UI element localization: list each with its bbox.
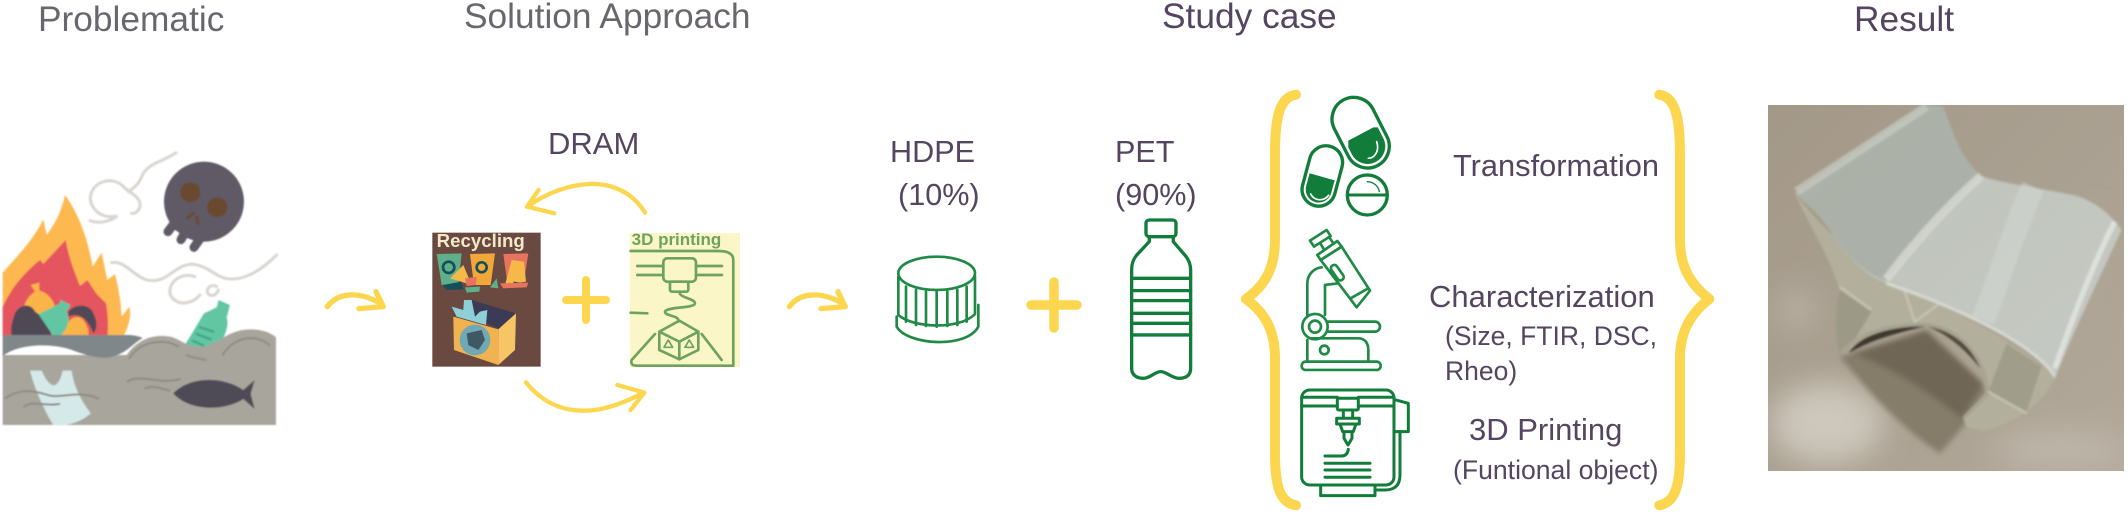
floor bbox=[1760, 97, 2128, 480]
recycling panel title: Recycling bbox=[437, 230, 525, 251]
text: Characterization: Characterization bbox=[1429, 279, 1655, 314]
plus between recycling and 3D printing bbox=[566, 280, 606, 320]
text: 3D Printing: (Funtional object) bbox=[1453, 455, 1658, 485]
floor patches and shadow bbox=[1770, 217, 2126, 467]
icon: PET bottle bbox=[1132, 220, 1191, 378]
left brace bbox=[1246, 95, 1296, 505]
recycling bins bbox=[437, 253, 528, 293]
label: HDPE 10% bbox=[890, 135, 980, 212]
label: PET 90%: (90%) bbox=[1115, 178, 1197, 212]
arch dark crescent bbox=[1848, 326, 1926, 353]
3D printing panel title: 3D printing bbox=[632, 230, 721, 249]
soft highlights bbox=[1796, 107, 1926, 192]
icon: pills bbox=[1300, 96, 1391, 217]
arch rim bbox=[1842, 324, 1988, 418]
chair underside and legs bbox=[1795, 193, 2055, 431]
right brace bbox=[1659, 95, 1709, 505]
text: 3D Printing bbox=[1453, 412, 1658, 485]
text: Characterization: Rheo) bbox=[1445, 356, 1517, 386]
plus between HDPE and PET bbox=[1031, 282, 1077, 328]
label: HDPE 10%: HDPE bbox=[890, 135, 975, 169]
text: Characterization: (Size, FTIR, DSC, bbox=[1445, 321, 1657, 351]
skull bbox=[164, 162, 244, 247]
printer line drawing bbox=[631, 251, 733, 366]
icon: bottle cap bbox=[897, 257, 978, 342]
photo: 3D printed chair bbox=[1768, 105, 2124, 471]
text: 3D Printing: 3D Printing bbox=[1469, 412, 1622, 447]
polluted ground, bottle, bag and fish bbox=[3, 300, 276, 425]
icon: microscope bbox=[1302, 230, 1381, 370]
chair seat surface bbox=[1795, 105, 2122, 378]
text: Transformation: Transformation bbox=[1453, 148, 1659, 183]
arrow: 3D printing back to recycling bbox=[527, 184, 645, 213]
arrow: recycling to 3D printing bbox=[526, 382, 644, 411]
heading: Result: Result bbox=[1854, 0, 1954, 39]
illustration: pollution problem bbox=[3, 153, 277, 425]
panel: 3D printing bbox=[630, 230, 740, 367]
text: Characterization bbox=[1429, 279, 1657, 386]
smoke bbox=[90, 153, 277, 303]
arrow: problem to solution bbox=[327, 292, 383, 309]
label: PET 90%: PET bbox=[1115, 135, 1174, 169]
icon: 3D printer bbox=[1302, 390, 1408, 496]
label: HDPE 10%: (10%) bbox=[898, 178, 980, 212]
chair backrest bbox=[1795, 105, 1980, 281]
arrow: solution to study case bbox=[789, 292, 845, 309]
label: DRAM: DRAM bbox=[548, 126, 639, 161]
fire and burning waste bbox=[3, 195, 130, 337]
panel: recycling bbox=[432, 230, 541, 367]
label: PET 90% bbox=[1115, 135, 1197, 212]
recycling box with bottles bbox=[452, 300, 516, 365]
heading: Problematic: Problematic bbox=[38, 0, 224, 39]
inner ribs bbox=[1840, 287, 2026, 413]
